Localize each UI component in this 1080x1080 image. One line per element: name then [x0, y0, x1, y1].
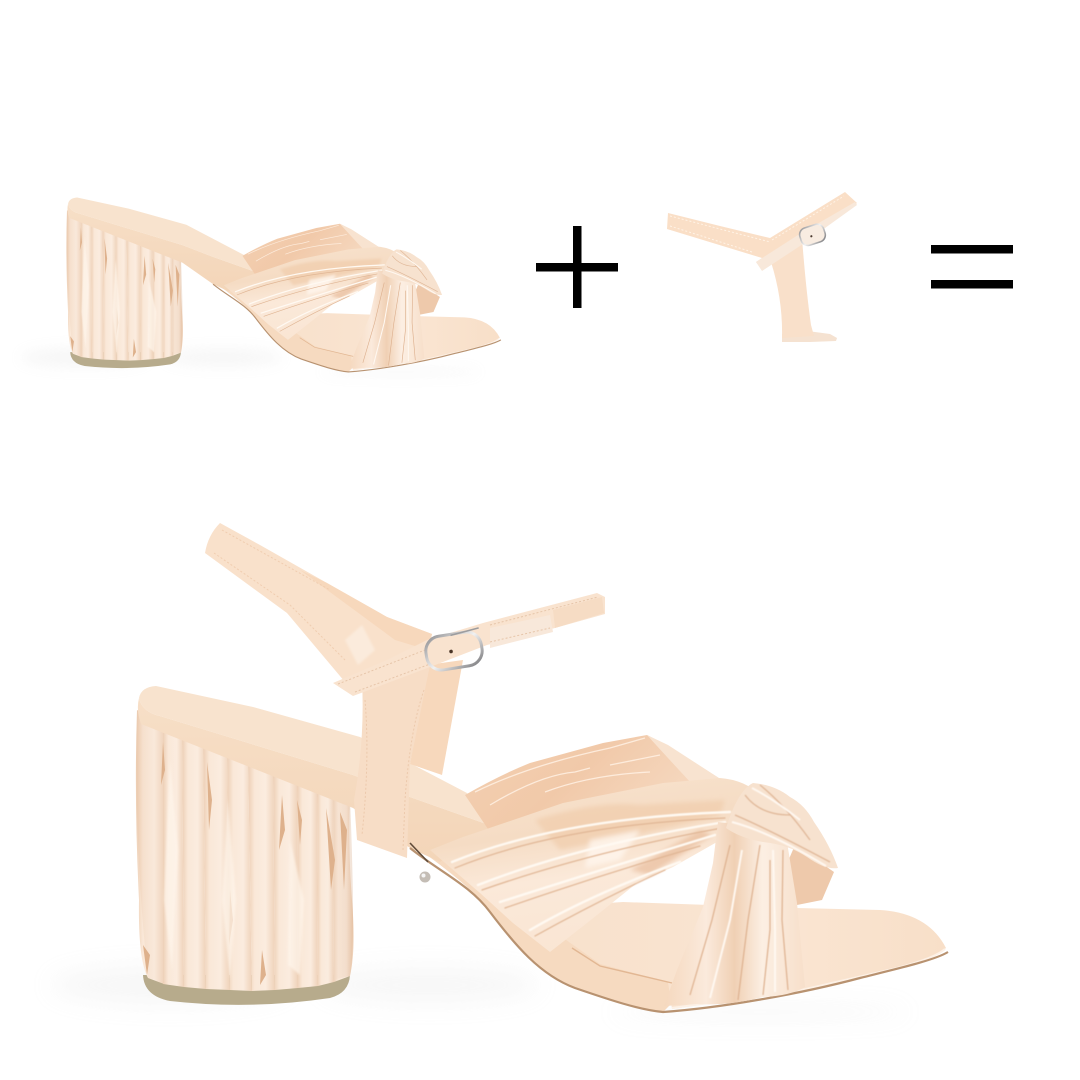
- plus sign: [536, 226, 618, 308]
- band shading: [535, 800, 725, 875]
- pleated block heel: [136, 710, 354, 991]
- gold arch line: [572, 948, 672, 983]
- stud line and metal shank: [410, 843, 428, 862]
- strap: buckle: [798, 222, 827, 247]
- front band pleat lines: [690, 845, 788, 1000]
- front pleated band: [664, 822, 805, 1006]
- heel tread: [143, 975, 350, 1005]
- insole: [139, 686, 492, 826]
- sole edge: [410, 848, 948, 1012]
- crossing pleated band: [430, 778, 760, 952]
- lining inner strap: [647, 735, 722, 784]
- strap: ankle band: [667, 192, 857, 270]
- footbed: [545, 902, 946, 1009]
- strap: buckle tongue: [756, 202, 857, 271]
- band pleat lines: [452, 812, 730, 936]
- small mule sandal (scaled copy of the shoe body): [20, 198, 501, 376]
- ankle strap wrinkle highlight: [345, 625, 375, 665]
- equals sign: [931, 245, 1013, 288]
- heel fold shadows: [143, 742, 347, 985]
- under knot fold: [780, 845, 834, 905]
- lining wrinkles: [475, 738, 710, 805]
- stud: [420, 872, 430, 882]
- rear lining: [465, 735, 722, 835]
- strap: foot tab: [782, 330, 837, 342]
- ankle strap rear: [205, 523, 432, 682]
- rear strap lining: [410, 660, 463, 775]
- heel highlights: [164, 760, 304, 980]
- ankle strap stitching: [214, 530, 345, 660]
- knot folds: [732, 785, 830, 866]
- sandal body: [50, 686, 948, 1019]
- heel counter side wall: [138, 698, 492, 862]
- vertical strap: [354, 665, 430, 858]
- arch side wall: [400, 835, 690, 1012]
- floor shadow: [50, 965, 910, 1019]
- footbed rim: [672, 949, 945, 1008]
- knot: [726, 783, 838, 868]
- large finished sandal: [50, 523, 948, 1019]
- buckle strap: [333, 593, 605, 696]
- strap: vertical piece: [771, 238, 814, 338]
- buckle: [423, 628, 484, 672]
- detachable ankle strap: [667, 192, 857, 342]
- strap: stitching: [670, 196, 844, 252]
